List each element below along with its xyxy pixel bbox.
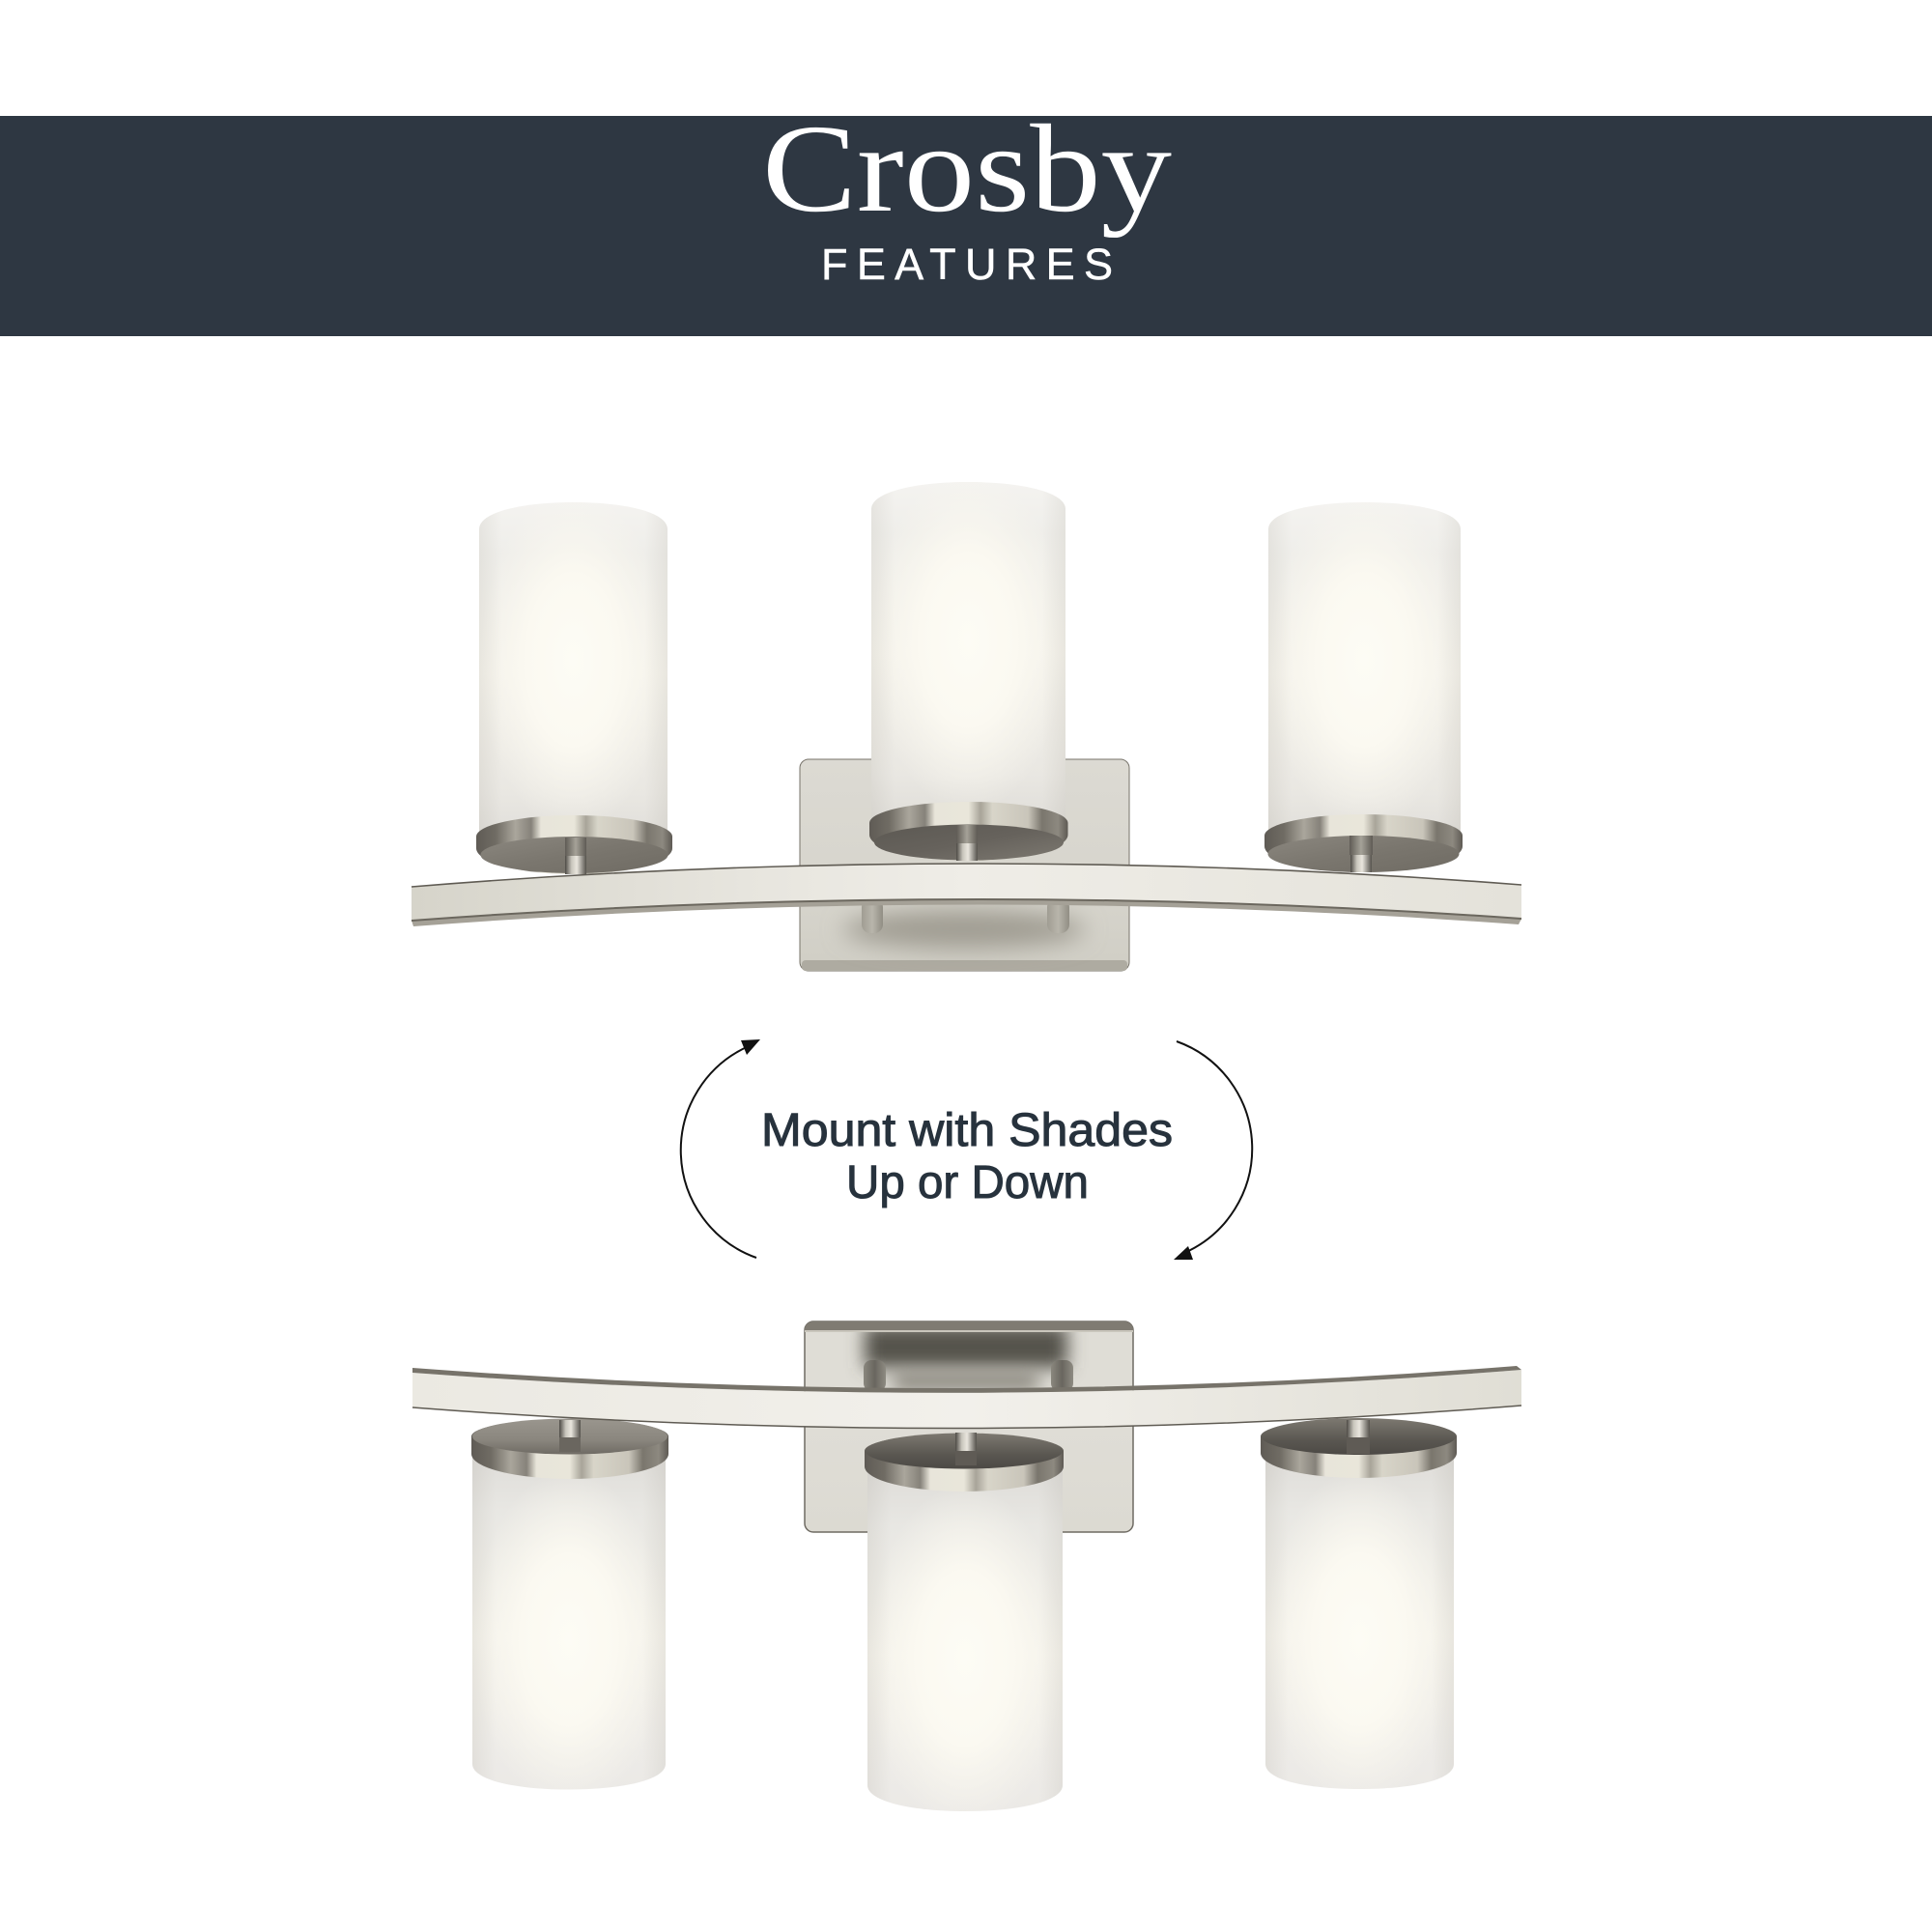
text: mount instruction: Up or Down (846, 1157, 1089, 1208)
arrows: rotate mount direction (681, 1039, 1252, 1260)
arrow: right arc pointing down (1174, 1041, 1252, 1260)
text: mount instruction: Mount with Shades (761, 1105, 1173, 1156)
curved bar (412, 1366, 1521, 1429)
backplate (805, 1321, 1133, 1532)
left ring (476, 815, 672, 874)
right ring (1261, 1418, 1457, 1478)
subtitle: Features: FEATURES (821, 240, 1113, 289)
right ring (1264, 814, 1463, 872)
arrow: left arc pointing up (681, 1039, 760, 1258)
middle ring (865, 1433, 1064, 1492)
curved bar (412, 864, 1521, 926)
left shade (479, 502, 668, 845)
title: Crosby: Crosby (762, 99, 1172, 239)
right shade (1268, 502, 1461, 845)
product image: fixture with shades up (412, 482, 1521, 971)
left shade (472, 1449, 666, 1789)
middle shade (871, 482, 1065, 826)
text: mount instruction (761, 1105, 1173, 1208)
left ring (471, 1418, 668, 1479)
middle ring (869, 802, 1068, 861)
middle shade (867, 1463, 1063, 1811)
right shade (1265, 1449, 1454, 1789)
header band (0, 99, 1932, 336)
product image: fixture with shades down (412, 1321, 1521, 1811)
backplate (800, 759, 1129, 971)
